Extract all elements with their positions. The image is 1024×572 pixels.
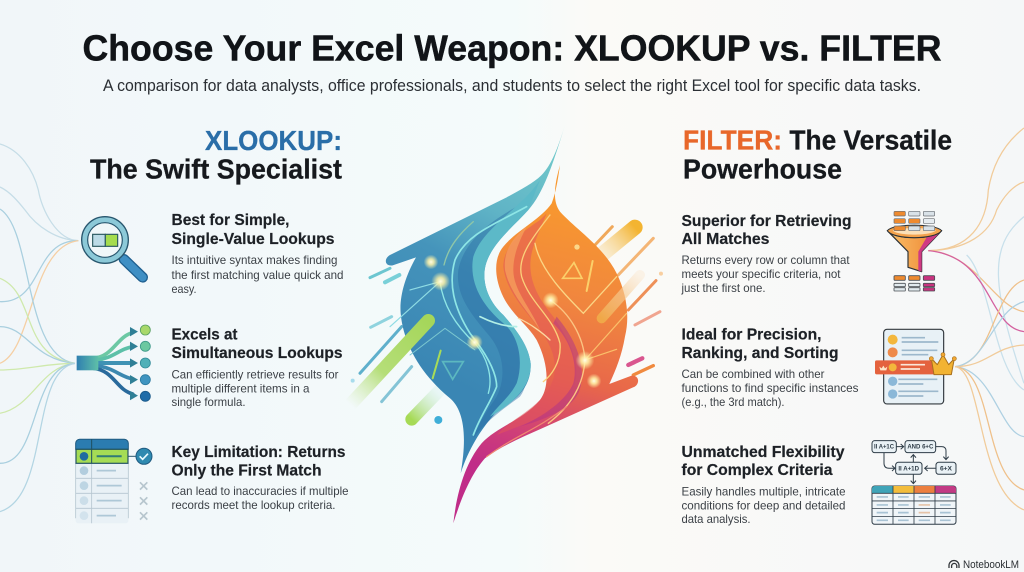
icon: fan-out arrows bbox=[77, 325, 150, 401]
item: best for simple: Its intuitive syntax makes finding bbox=[172, 254, 338, 267]
icon: logic flow and table: II A+1D bbox=[898, 466, 920, 472]
orange inner waves bbox=[497, 213, 576, 435]
item: excels at simultaneous: Can efficiently retrieve results for bbox=[172, 368, 339, 382]
item: key limitation: records meet the lookup criteria. bbox=[172, 499, 336, 512]
item: excels at simultaneous: Excels at bbox=[172, 326, 238, 344]
blue inner waves bbox=[458, 207, 527, 438]
item: ideal for precision: Ranking, and Sorting bbox=[682, 345, 838, 362]
item: excels at simultaneous: multiple different items in a bbox=[172, 382, 310, 396]
icon: logic flow and table bbox=[872, 441, 956, 524]
back streaks left bbox=[360, 268, 438, 419]
item: best for simple: Best for Simple, bbox=[172, 212, 290, 229]
icon: magnifier bbox=[82, 217, 143, 277]
item: best for simple: the first matching value quick and bbox=[172, 269, 344, 282]
glowing nodes bbox=[424, 255, 601, 388]
orange half bbox=[453, 165, 638, 523]
item: ideal for precision: Ideal for Precision, bbox=[682, 326, 822, 344]
item: key limitation: Can lead to inaccuracies if multiple bbox=[172, 485, 348, 498]
item: superior for retrieving: Returns every row or column that bbox=[682, 254, 850, 267]
item: unmatched flexibility: for Complex Criteria bbox=[682, 462, 833, 479]
item: superior for retrieving bbox=[681, 213, 852, 295]
item: excels at simultaneous: single formula. bbox=[172, 396, 246, 409]
item: excels at simultaneous: Simultaneous Lookups bbox=[172, 345, 343, 362]
heading: XLOOKUP: XLOOKUP: bbox=[205, 125, 342, 156]
item: superior for retrieving: Superior for Retrieving bbox=[682, 213, 852, 230]
heading: XLOOKUP: The Swift Specialist bbox=[90, 154, 342, 184]
heading: XLOOKUP bbox=[90, 125, 342, 184]
item: superior for retrieving: meets your specific criteria, not bbox=[682, 268, 841, 281]
item: key limitation bbox=[172, 444, 348, 512]
item: key limitation: Only the First Match bbox=[172, 462, 322, 480]
back streaks right bbox=[595, 227, 660, 375]
heading: FILTER bbox=[683, 124, 952, 184]
right connector lines bbox=[928, 128, 1024, 510]
item: unmatched flexibility: Easily handles multiple, intricate bbox=[682, 486, 846, 498]
item: superior for retrieving: just the first one. bbox=[681, 282, 766, 295]
left connector lines bbox=[0, 144, 78, 512]
icon: logic flow and table: 6+X bbox=[940, 466, 952, 472]
central emblem bbox=[350, 125, 663, 523]
item: unmatched flexibility: Unmatched Flexibility bbox=[682, 444, 845, 461]
blue half bbox=[386, 125, 565, 473]
icon: logic flow and table: II A+1C bbox=[874, 445, 895, 451]
item: excels at simultaneous bbox=[172, 326, 343, 409]
heading: FILTER: FILTER: The Versatile bbox=[683, 124, 952, 156]
icon: logic flow and table: AND 6+C bbox=[907, 445, 934, 451]
item: best for simple: Single-Value Lookups bbox=[172, 231, 335, 248]
item: unmatched flexibility bbox=[682, 444, 846, 526]
icon: table first match bbox=[76, 439, 152, 523]
item: ideal for precision: functions to find specific instances bbox=[682, 382, 859, 395]
item: unmatched flexibility: conditions for deep and detailed bbox=[682, 500, 846, 512]
item: superior for retrieving: All Matches bbox=[682, 231, 770, 248]
icon: funnel bbox=[887, 211, 942, 291]
heading: FILTER: Powerhouse bbox=[683, 154, 842, 184]
subtitle: A comparison for data analysts, office professionals, and students to select the right Excel tool for specific data tasks. bbox=[103, 77, 921, 95]
item: best for simple: easy. bbox=[172, 283, 196, 296]
item: best for simple bbox=[172, 212, 344, 296]
item: ideal for precision bbox=[682, 326, 859, 409]
item: ideal for precision: Can be combined with other bbox=[682, 368, 825, 381]
front streaks bbox=[350, 275, 640, 405]
item: unmatched flexibility: data analysis. bbox=[682, 513, 750, 526]
item: ideal for precision: (e.g., the 3rd match). bbox=[682, 396, 784, 409]
item: key limitation: Key Limitation: Returns bbox=[172, 444, 346, 461]
icon: ranked list with crown bbox=[875, 329, 956, 404]
title: Choose Your Excel Weapon: XLOOKUP vs. FILTER bbox=[82, 28, 942, 68]
